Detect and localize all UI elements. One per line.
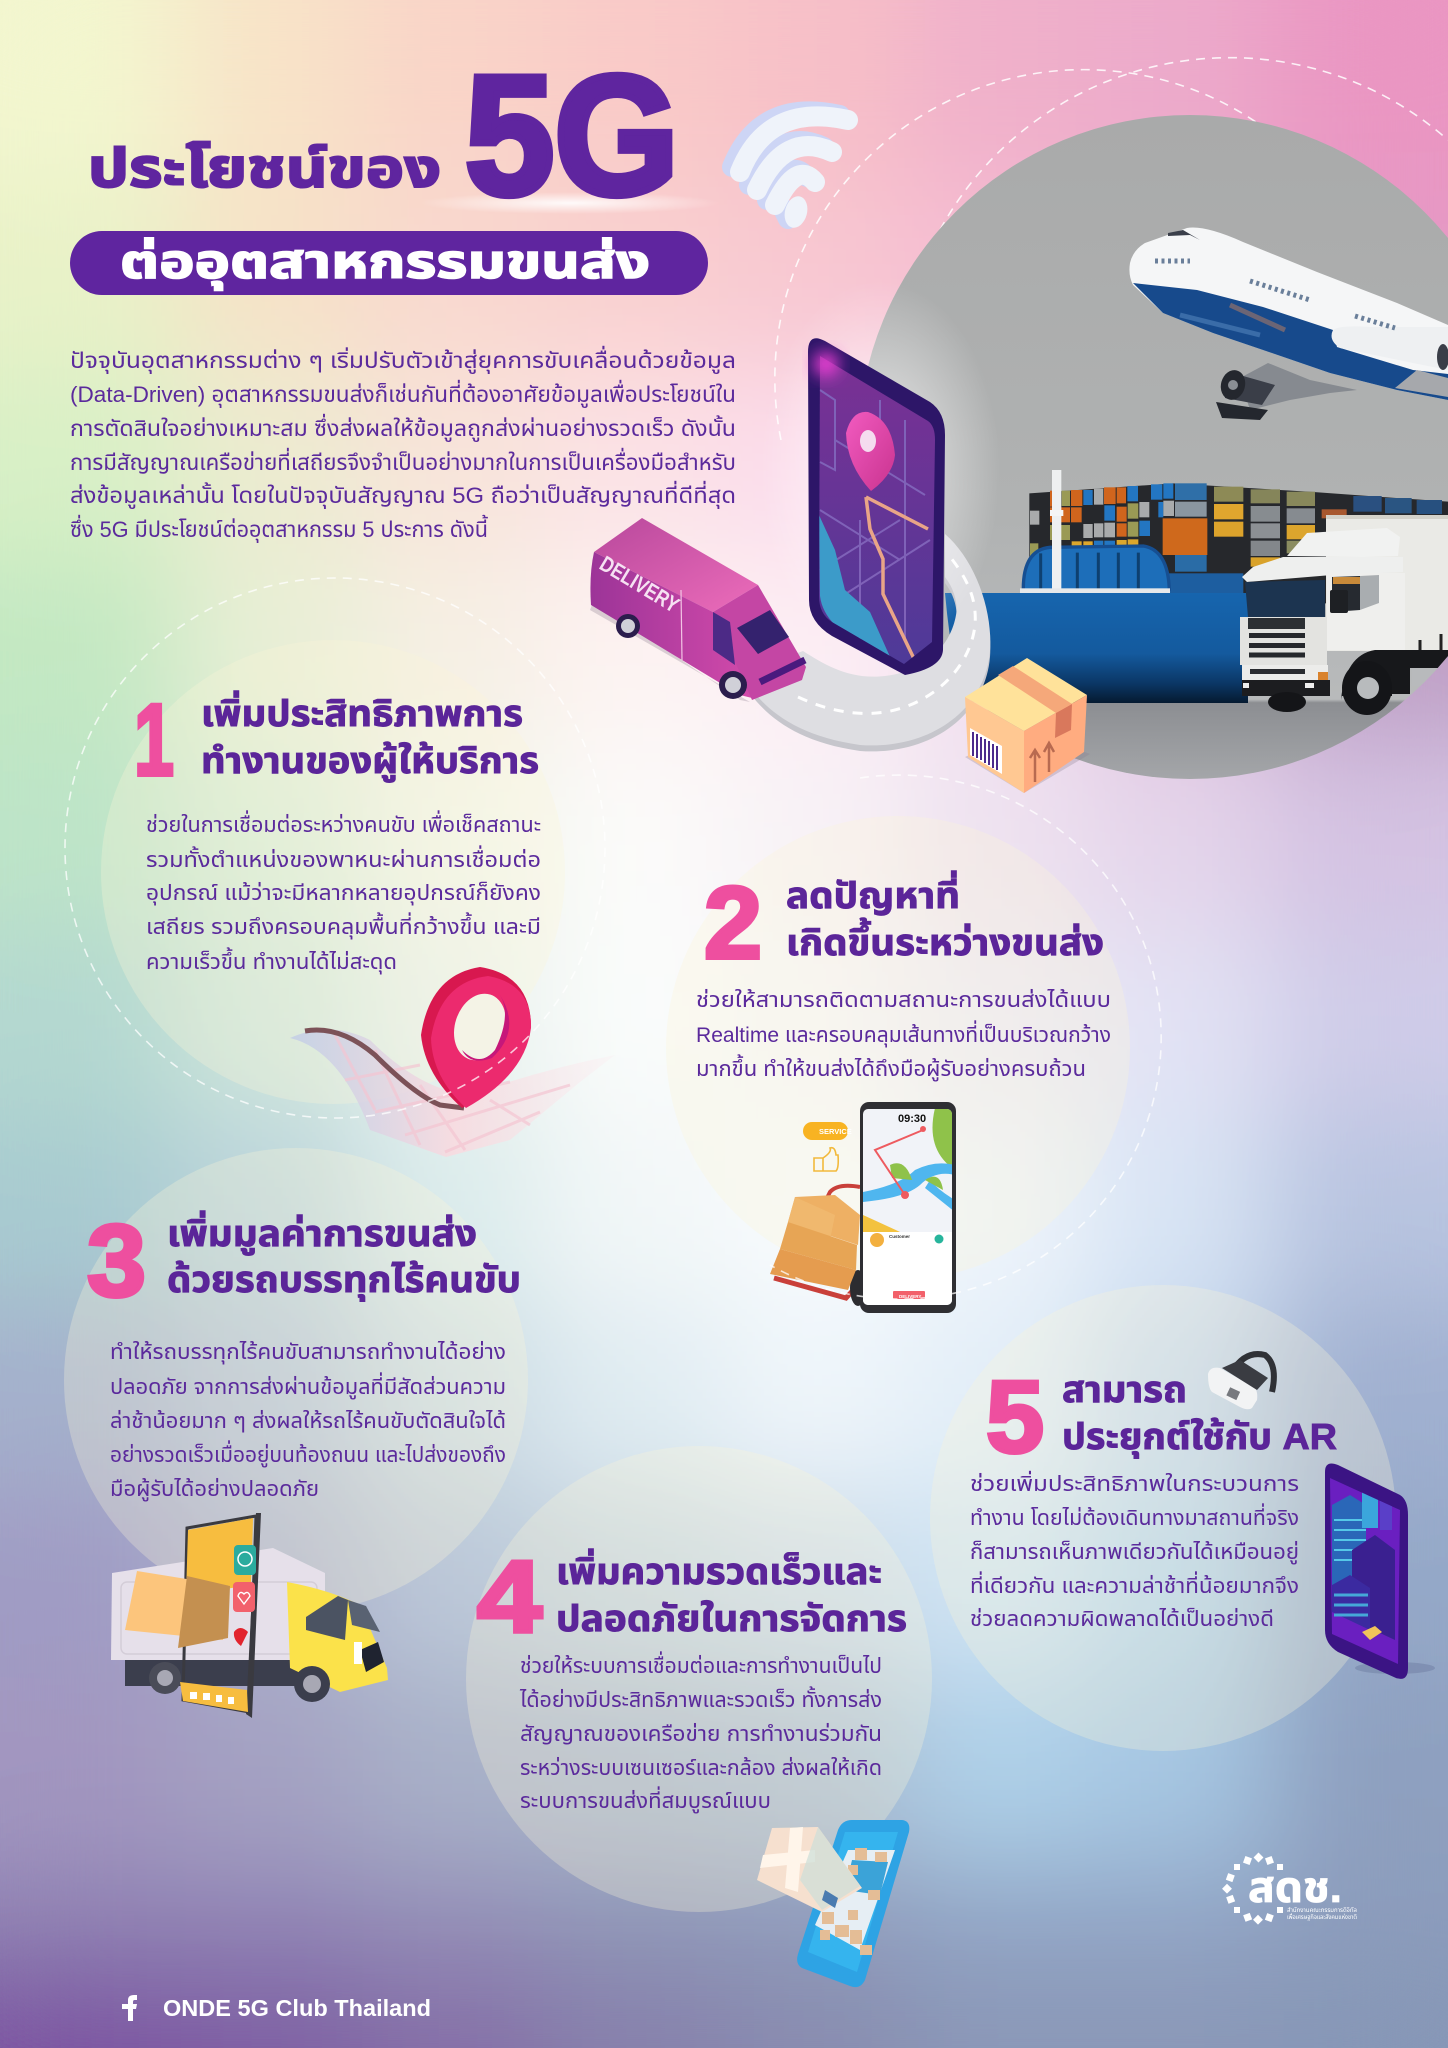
- logo: สดช.: สดช.: [1248, 1864, 1342, 1912]
- icon: airplane: [1129, 228, 1448, 420]
- icon: tracking phone with parcels: Customer: [889, 1234, 910, 1239]
- intro text block: การตัดสินใจอย่างเหมาะสม ซึ่งส่งผลให้ข้อมูลถูกส่งผ่านอย่างรวดเร็ว ดังนั้น: [70, 413, 736, 442]
- heading 4: เพิ่มความรวดเร็วและ: [556, 1548, 882, 1592]
- body 2: มากขึ้น ทำให้ขนส่งได้ถึงมือผู้รับอย่างครบถ้วน: [696, 1054, 1086, 1082]
- icon: wifi: [732, 111, 848, 230]
- icon: tracking phone with parcels: 09:30: [898, 1113, 926, 1125]
- body 5: ก็สามารถเห็นภาพเดียวกันได้เหมือนอยู่: [970, 1539, 1299, 1565]
- icon: AR phone city: [1325, 1464, 1435, 1679]
- icon: delivery van: DELIVERY: [595, 551, 684, 618]
- heading 2: ลดปัญหาที่: [786, 870, 960, 916]
- intro text block: การมีสัญญาณเครือข่ายที่เสถียรจึงจำเป็นอย่างมากในการเป็นเครื่องมือสำหรับ: [70, 447, 736, 475]
- panel: section 5: [970, 1354, 1435, 1679]
- heading 5: ประยุกต์ใช้กับ AR: [1062, 1416, 1337, 1458]
- subtitle pill: [70, 231, 708, 295]
- body 3: อย่างรวดเร็วเมื่ออยู่บนท้องถนน และไปส่งของถึง: [110, 1440, 506, 1468]
- icon: tracking phone with parcels: [770, 1102, 956, 1313]
- containers on ship: [1020, 470, 1448, 603]
- body 4: [519, 1651, 882, 1814]
- icon: location pin on map: [290, 967, 615, 1157]
- icon: tracking phone with parcels: DELIVERY: [899, 1294, 921, 1299]
- subtitle pill: ต่ออุตสาหกรรมขนส่ง: [120, 235, 650, 290]
- icon: delivery van: [590, 518, 806, 702]
- body 1: อุปกรณ์ แม้ว่าจะมีหลากหลายอุปกรณ์ก็ยังคง: [146, 880, 541, 906]
- intro text block: [70, 345, 736, 543]
- body 3: ล่าช้าน้อยมาก ๆ ส่งผลให้รถไร้คนขับตัดสินใจได้: [110, 1409, 506, 1433]
- logo: สดช.: สำนักงานคณะกรรมการดิจิทัล: [1287, 1907, 1357, 1914]
- icon: phone glow: [760, 280, 1000, 660]
- body 4: สัญญาณของเครือข่าย การทำงานร่วมกัน: [520, 1722, 882, 1746]
- heading 1: [201, 690, 539, 782]
- intro text block: (Data-Driven) อุตสาหกรรมขนส่งก็เช่นกันที่ต้องอาศัยข้อมูลเพื่อประโยชน์ใน: [70, 379, 736, 408]
- body 4: ระบบการขนส่งที่สมบูรณ์แบบ: [520, 1786, 771, 1814]
- body 2: Realtime และครอบคลุมเส้นทางที่เป็นบริเวณกว้าง: [696, 1020, 1111, 1048]
- section background circles: [64, 640, 1396, 1912]
- heading 4: [556, 1548, 907, 1639]
- icon: yellow truck with phone: [111, 1513, 388, 1718]
- hero photo circle: [850, 115, 1448, 779]
- icon: VR headset: [1208, 1354, 1274, 1409]
- panel: section 2: [696, 866, 1111, 1313]
- body 5: ทำงาน โดยไม่ต้องเดินทางมาสถานที่จริง: [970, 1503, 1299, 1530]
- body 5: ที่เดียวกัน และความล่าช้าที่น้อยมากจึง: [970, 1571, 1299, 1598]
- body 3: [110, 1340, 506, 1502]
- body 4: ระหว่างระบบเซนเซอร์และกล้อง ส่งผลให้เกิด: [520, 1756, 882, 1780]
- panel: section 4: [477, 1540, 909, 1987]
- heading 1: ทำงานของผู้ให้บริการ: [201, 740, 539, 782]
- panel: section 3: [87, 1204, 521, 1718]
- heading 4: ปลอดภัยในการจัดการ: [556, 1598, 907, 1639]
- ship hull: [945, 593, 1248, 703]
- body 3: มือผู้รับได้อย่างปลอดภัย: [110, 1477, 319, 1502]
- title line: ประโยชน์ของ: ประโยชน์ของ: [88, 139, 441, 199]
- number 1: 1: [134, 683, 174, 797]
- body 3: ปลอดภัย จากการส่งผ่านข้อมูลที่มีสัดส่วนความ: [110, 1372, 506, 1400]
- icon: white truck: [1240, 515, 1448, 715]
- heading 2: เกิดขึ้นระหว่างขนส่ง: [786, 917, 1104, 963]
- body 2: [696, 988, 1111, 1082]
- ship bridge and tank: [1025, 548, 1168, 588]
- icon: map phone: [808, 338, 945, 675]
- body 3: ทำให้รถบรรทุกไร้คนขับสามารถทำงานได้อย่าง: [110, 1340, 506, 1365]
- heading 3: ด้วยรถบรรทุกไร้คนขับ: [167, 1259, 521, 1301]
- heading 2: [786, 870, 1104, 963]
- body 1: [146, 810, 541, 975]
- number 3: 3: [87, 1204, 146, 1318]
- icon: blue phone with parcels and globe: [757, 1820, 909, 1987]
- body 1: ช่วยในการเชื่อมต่อระหว่างคนขับ เพื่อเช็คสถานะ: [146, 810, 541, 837]
- number 2: 2: [704, 866, 762, 980]
- body 1: รวมทั้งตำแหน่งของพาหนะผ่านการเชื่อมต่อ: [146, 845, 541, 872]
- intro text block: ส่งข้อมูลเหล่านั้น โดยในปัจจุบันสัญญาณ 5G ถือว่าเป็นสัญญาณที่ดีที่สุด: [70, 480, 736, 509]
- icon: isometric road: [741, 534, 990, 751]
- number 5: 5: [986, 1360, 1044, 1474]
- footer: facebook page: ONDE 5G Club Thailand: [163, 1995, 431, 2021]
- logo: สดช.: เพื่อเศรษฐกิจและสังคมแห่งชาติ: [1287, 1912, 1357, 1921]
- heading 3: [167, 1210, 521, 1301]
- heading 1: เพิ่มประสิทธิภาพการ: [201, 690, 523, 734]
- body 2: ช่วยให้สามารถติดตามสถานะการขนส่งได้แบบ: [696, 988, 1111, 1012]
- heading 5: สามารถ: [1062, 1369, 1187, 1410]
- body 4: ได้อย่างมีประสิทธิภาพและรวดเร็ว ทั้งการส่ง: [519, 1686, 882, 1712]
- body 1: เสถียร รวมถึงครอบคลุมพื้นที่กว้างขึ้น และมี: [146, 912, 541, 940]
- body 5: [970, 1470, 1299, 1631]
- icon: tracking phone with parcels: SERVICE: [819, 1127, 852, 1136]
- intro text block: ซึ่ง 5G มีประโยชน์ต่ออุตสาหกรรม 5 ประการ ดังนี้: [70, 514, 488, 543]
- decorative dashed rings over sections: [65, 578, 1161, 1299]
- body 4: ช่วยให้ระบบการเชื่อมต่อและการทำงานเป็นไป: [520, 1651, 882, 1678]
- panel: section 1: [134, 683, 615, 1157]
- body 1: ความเร็วขึ้น ทำงานได้ไม่สะดุด: [146, 947, 397, 975]
- intro text block: ปัจจุบันอุตสาหกรรมต่าง ๆ เริ่มปรับตัวเข้าสู่ยุคการขับเคลื่อนด้วยข้อมูล: [70, 345, 736, 374]
- body 5: ช่วยเพิ่มประสิทธิภาพในกระบวนการ: [970, 1470, 1299, 1496]
- heading 5: [1062, 1369, 1337, 1458]
- number 4: 4: [477, 1540, 542, 1654]
- heading 3: เพิ่มมูลค่าการขนส่ง: [167, 1210, 477, 1255]
- body 5: ช่วยลดความผิดพลาดได้เป็นอย่างดี: [970, 1607, 1274, 1631]
- flare under 5G: [420, 192, 720, 214]
- decorative dashed rings behind hero: [775, 58, 1448, 440]
- icon: parcel box: [965, 658, 1090, 793]
- logo: สดช.: [1222, 1853, 1357, 1925]
- title: 5G: 5G: [465, 41, 679, 231]
